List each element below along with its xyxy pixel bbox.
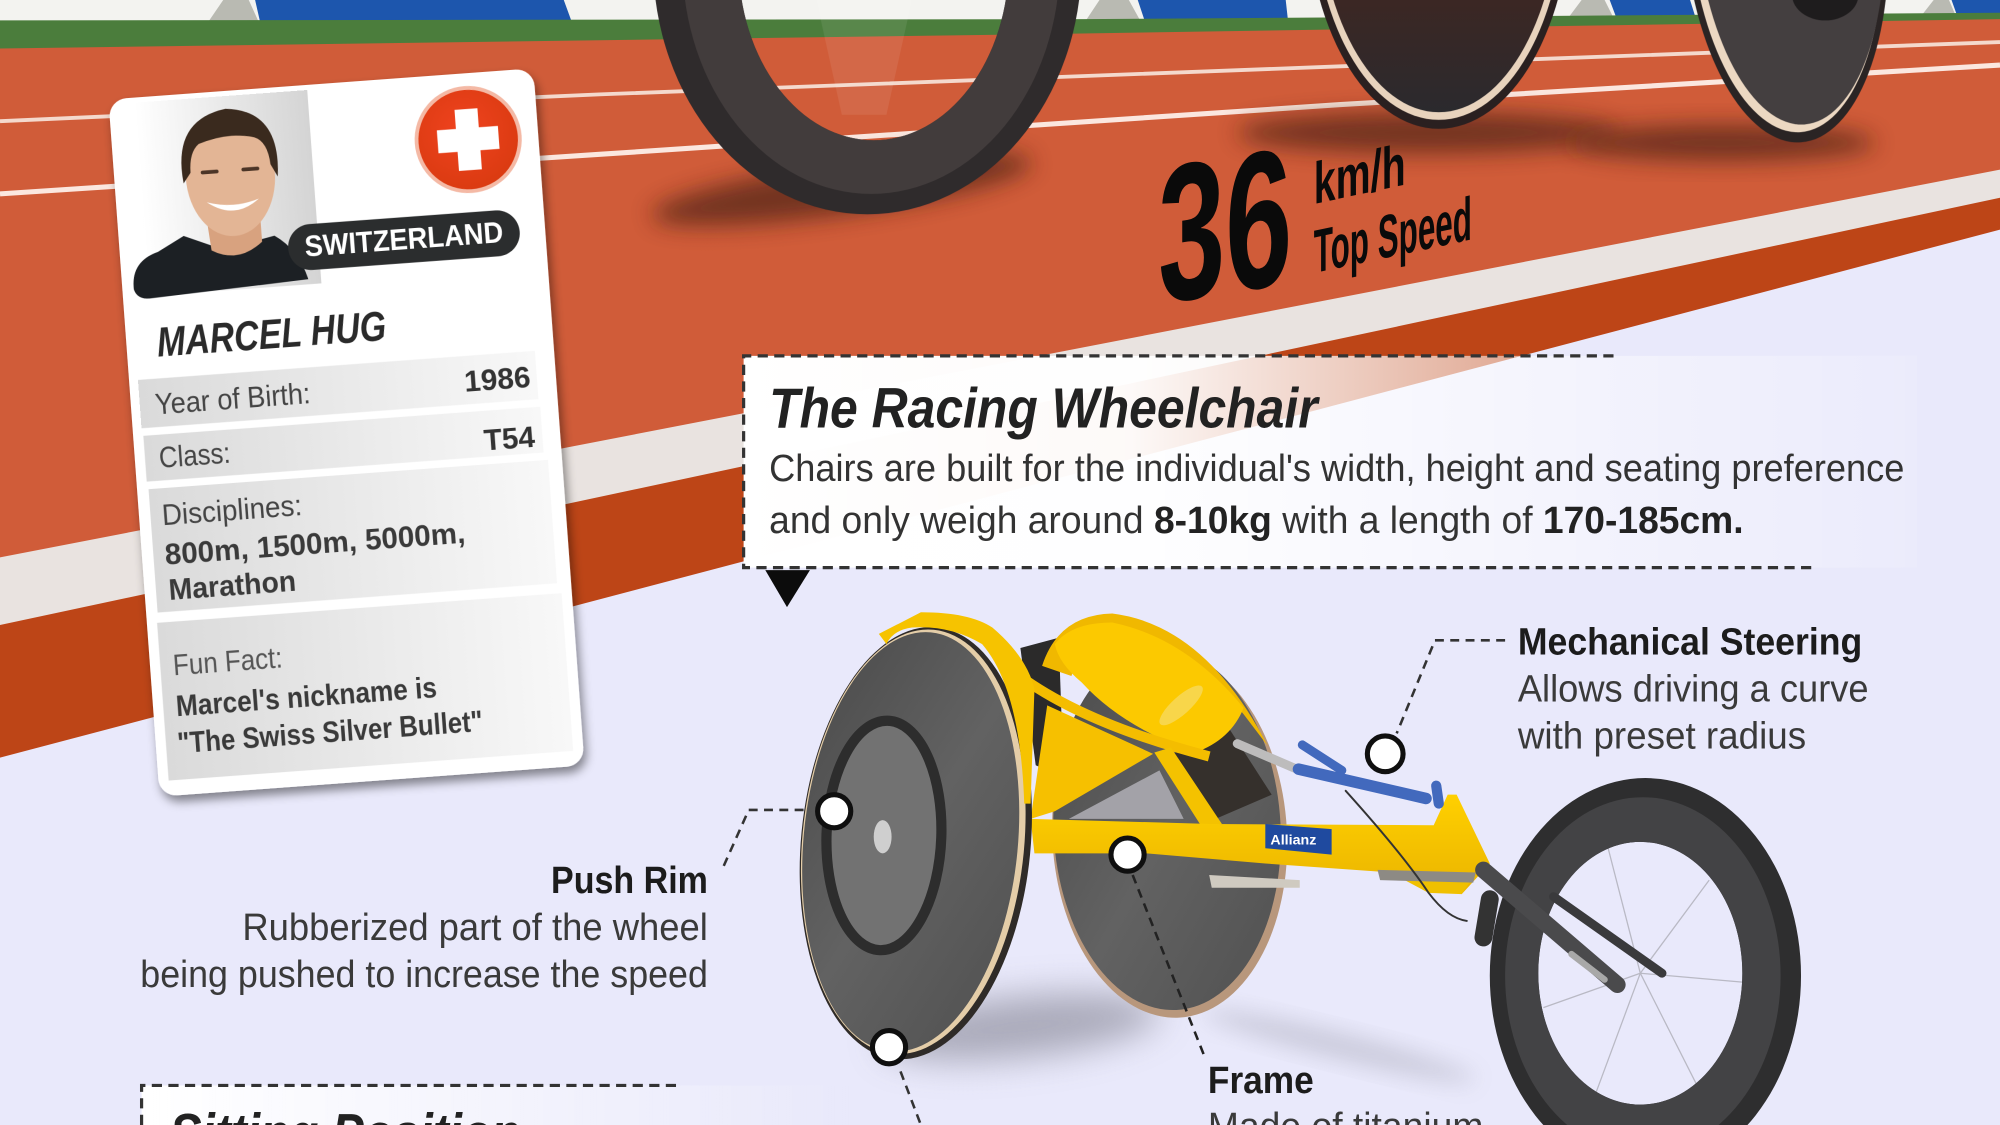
row: class: Class: <box>158 437 232 475</box>
flag: Switzerland <box>411 82 526 197</box>
row: year of birth: 1986 <box>463 361 532 399</box>
seat shell <box>1005 614 1272 827</box>
row: fun fact: Marcel's nickname is <box>175 671 438 723</box>
description: and only weigh around 8-10kg with a length of 170-185cm. <box>769 499 1744 542</box>
callout: mechanical steering: Mechanical Steering <box>1518 620 1862 663</box>
heading: The Racing Wheelchair <box>769 376 1320 439</box>
row: disciplines: Disciplines: <box>161 489 303 532</box>
front wheel <box>1490 778 1801 1125</box>
wheel fender <box>879 612 1034 804</box>
panel: sitting position <box>142 1085 856 1125</box>
row: class: T54 <box>483 421 537 457</box>
callout: push rim: being pushed to increase the speed <box>140 953 708 996</box>
callout: mechanical steering: Allows driving a curve <box>1518 668 1869 711</box>
portrait photo <box>120 90 322 300</box>
callout: frame: Frame <box>1208 1059 1314 1102</box>
ground shadows <box>878 982 1479 1092</box>
country pill: SWITZERLAND <box>303 216 504 263</box>
callout: mechanical steering: with preset radius <box>1517 715 1806 758</box>
description: Chairs are built for the individual's width, height and seating preference <box>769 447 1904 490</box>
stadium backdrop <box>0 0 2000 54</box>
row: year of birth: Year of Birth: <box>154 377 312 421</box>
row: fun fact: "The Swiss Silver Bullet" <box>176 705 484 760</box>
row: disciplines <box>149 460 557 613</box>
front fork <box>1483 870 1662 985</box>
sponsor logo <box>1265 824 1332 855</box>
frame <box>1031 795 1490 894</box>
top speed label: Top Speed <box>1314 185 1472 287</box>
pointer triangle <box>765 570 810 607</box>
steering handles <box>1237 744 1467 921</box>
callout: push rim: Rubberized part of the wheel <box>242 906 708 949</box>
row: fun fact: Fun Fact: <box>172 641 284 682</box>
row: fun fact <box>157 593 573 781</box>
callout: push rim: Push Rim <box>551 859 708 902</box>
callout: mechanical steering <box>1367 620 1869 772</box>
description <box>769 447 1904 542</box>
athlete card <box>108 68 584 797</box>
callout: push rim <box>140 795 851 996</box>
callout: frame <box>1111 838 1483 1125</box>
athlete name: MARCEL HUG <box>155 302 388 366</box>
row: year of birth <box>138 351 538 428</box>
running track <box>0 19 2000 758</box>
near rear wheel with push rim <box>781 616 1051 1070</box>
top speed label: 36 <box>1158 107 1292 346</box>
top speed label: km/h <box>1314 131 1406 217</box>
wheelchair illustration <box>781 612 1801 1125</box>
row: disciplines: 800m, 1500m, 5000m, <box>164 517 466 572</box>
sponsor logo: Allianz <box>1270 831 1316 847</box>
front wheel of the racing chair <box>653 0 1082 214</box>
wheel shadows on track <box>649 112 1875 241</box>
row: class <box>143 407 544 482</box>
rear wheels of the racing chair <box>1306 0 1903 149</box>
callout: tyre marker <box>872 1031 921 1125</box>
row: disciplines: Marathon <box>168 565 297 607</box>
top speed label <box>1158 107 1472 346</box>
far rear wheel <box>1043 642 1296 1024</box>
panel: the racing wheelchair <box>744 356 1917 607</box>
